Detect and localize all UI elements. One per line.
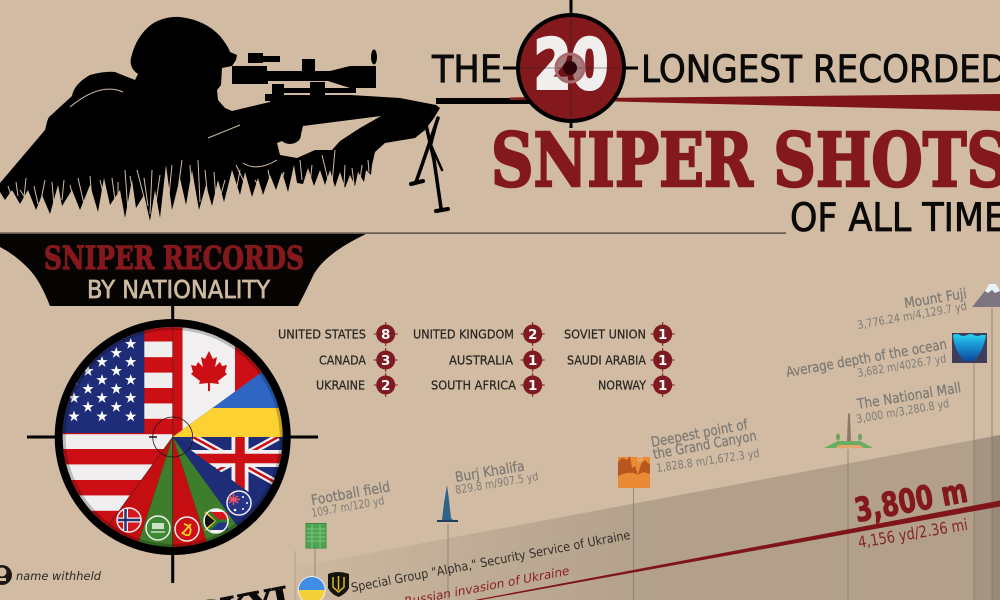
- legend: sniper count by country: 1: [658, 353, 667, 369]
- panel: sniper records heading: [0, 234, 366, 306]
- chart: nationality pie in reticle: [27, 306, 318, 583]
- heading: sniper records: SNIPER RECORDS: [44, 239, 304, 277]
- bullet trail: [510, 97, 530, 100]
- icon: Grand Canyon: [618, 456, 650, 488]
- legend: sniper count by country: NORWAY: [598, 378, 646, 392]
- wedge: United Kingdom: [173, 437, 283, 502]
- wedge: Ukraine: [173, 372, 283, 437]
- trigger gap: [277, 116, 381, 158]
- label: Mount Fuji: 3,776.24 m/4,129.7 yd: [856, 299, 968, 332]
- legend: sniper count by country: CANADA: [319, 352, 366, 368]
- legend: sniper count by country: 1: [528, 353, 537, 369]
- legend: sniper count by country: SOVIET UNION: [564, 326, 646, 342]
- title rule: [0, 232, 786, 234]
- icon and note: name withheld: [0, 565, 102, 585]
- title: THE: THE: [431, 48, 502, 91]
- record shot trajectory: [472, 500, 1000, 600]
- legend: sniper count by country: 2: [528, 327, 537, 343]
- label: Burj Khalifa: 829.8 m/907.5 yd: [454, 469, 539, 497]
- wedge: Saudi Arabia: [139, 437, 173, 547]
- legend: sniper count by country: 1: [658, 378, 667, 394]
- icon: Alpha shield: [328, 572, 349, 597]
- reference drop lines: [295, 308, 992, 600]
- legend: sniper count by country: UNITED STATES: [278, 326, 366, 342]
- rim shadow: [64, 328, 281, 546]
- flag: Norway: [117, 508, 141, 532]
- legend: sniper count by country: 8: [381, 327, 390, 343]
- label: Mount Fuji: Mount Fuji: [903, 286, 968, 312]
- heading: by nationality: BY NATIONALITY: [87, 275, 271, 304]
- grass blades and straps: [8, 89, 369, 214]
- flag: Australia: [227, 491, 251, 515]
- label: Grand Canyon: the Grand Canyon: [652, 428, 758, 463]
- label: ocean depth: Average depth of the ocean: [785, 337, 948, 381]
- bipod: [411, 118, 448, 211]
- record conversion: 4,156 yd/2.36 mi: [857, 515, 969, 552]
- trigger guard: [280, 127, 300, 143]
- flag: Saudi Arabia: [146, 516, 170, 540]
- legend: sniper count by country: 3: [381, 353, 390, 369]
- legend ticks: [374, 322, 675, 397]
- wedge: Canada: [172, 327, 262, 437]
- unit name: Special Group "Alpha," Security Service of Ukraine: [350, 527, 632, 595]
- wedge: Australia: [173, 437, 262, 526]
- legend: sniper count by country: AUSTRALIA: [449, 352, 513, 368]
- sniper silhouette: [0, 17, 448, 221]
- flag: Soviet Union: [175, 517, 199, 541]
- red bullet trail right: [597, 94, 1000, 111]
- flag: South Africa: [204, 509, 228, 533]
- legend: sniper count by country: UNITED KINGDOM: [413, 326, 514, 342]
- wedge: South Africa: [173, 437, 237, 542]
- scope knob: [371, 50, 377, 64]
- pie reticle overlay: [149, 327, 193, 547]
- label: Grand Canyon: 1,828.8 m/1,672.3 yd: [655, 446, 760, 475]
- legend: sniper count by country: SAUDI ARABIA: [567, 352, 646, 368]
- label: Grand Canyon: [650, 417, 760, 475]
- icon: ocean depth: [952, 333, 987, 363]
- label: Burj Khalifa: [454, 458, 539, 497]
- label: National Mall: [855, 380, 962, 426]
- reticle badge: 20: [503, 0, 638, 128]
- wedge: Soviet Union: [173, 437, 207, 547]
- legend: sniper count by country: UKRAINE: [316, 378, 365, 392]
- note text: name withheld: [16, 569, 102, 583]
- icon: National Mall: [824, 413, 873, 448]
- label: Mount Fuji: [856, 286, 968, 332]
- icon: Mount Fuji: [972, 284, 1000, 307]
- label: football field: Football field: [310, 479, 391, 509]
- legend: sniper count by country: 2: [381, 378, 390, 394]
- scope: [232, 53, 376, 101]
- legend: sniper count by country: [278, 322, 675, 397]
- chart band: distance wedge: [295, 435, 1000, 600]
- legend: sniper count by country: 1: [528, 378, 537, 394]
- wedge: Norway: [108, 437, 173, 542]
- flag: Ukraine: [298, 576, 326, 600]
- number 20: 20: [534, 26, 608, 105]
- label: football field: [310, 479, 391, 520]
- legend marks: [376, 324, 672, 394]
- rifle barrel: [436, 98, 532, 104]
- legend: sniper count by country: 1: [658, 327, 667, 343]
- rifle rail: [273, 88, 356, 93]
- icon: Burj Khalifa: [437, 485, 458, 522]
- label: National Mall: The National Mall: [855, 380, 962, 413]
- label: ocean depth: 3,682 m/4026.7 yd: [856, 351, 947, 380]
- legend: sniper count by country: SOUTH AFRICA: [431, 378, 516, 392]
- label: Burj Khalifa: Burj Khalifa: [454, 458, 526, 486]
- label: Grand Canyon: Deepest point of: [650, 417, 750, 451]
- icon: football field: [306, 524, 326, 548]
- label: football field: 109.7 m/120 yd: [310, 493, 385, 520]
- wedge: United States: [62, 327, 173, 526]
- pack highlights: [45, 108, 52, 125]
- label: National Mall: 3,000 m/3,280.8 yd: [855, 396, 950, 426]
